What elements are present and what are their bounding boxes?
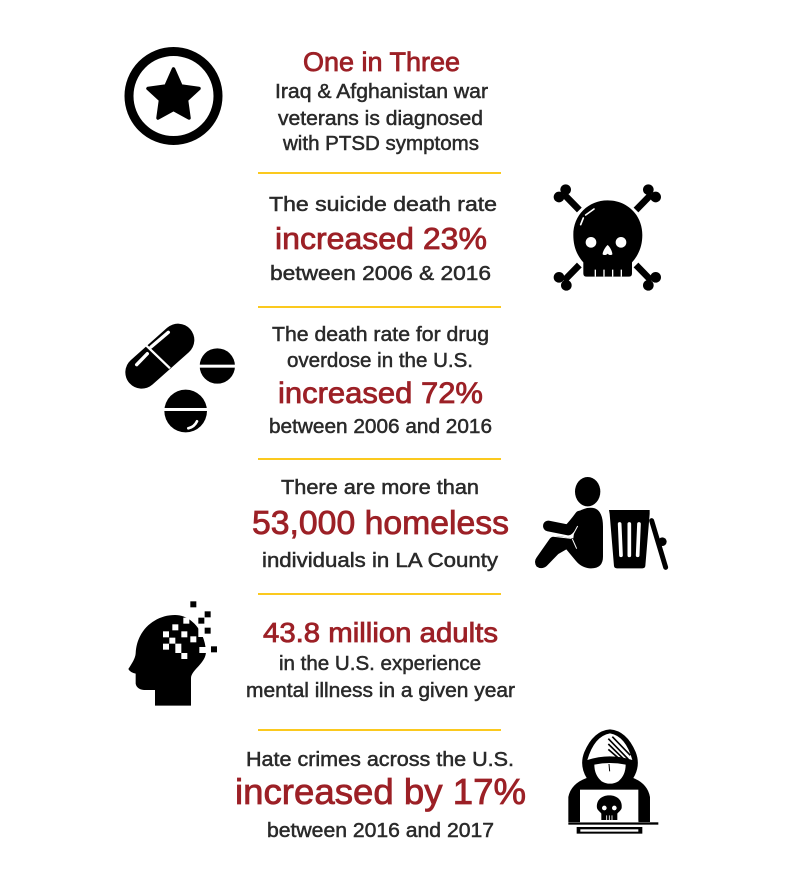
text: mental illness description: mental illness in a given year [246,680,515,702]
heading: increased 23%: increased 23% [275,221,487,256]
panel: mental illness statistic [128,601,515,706]
icon: hooded hacker at laptop [568,729,658,834]
text: PTSD description: Iraq & Afghanistan war [275,81,488,103]
text: PTSD description: with PTSD symptoms [282,133,479,155]
text: homeless intro: There are more than [281,477,479,499]
text: overdose intro [272,324,489,372]
panel: hate crimes statistic [235,729,658,842]
text: overdose period: between 2006 and 2016 [269,416,492,438]
panel: suicide statistic [269,184,661,291]
heading: increased 72%: increased 72% [278,377,483,410]
text: overdose intro: overdose in the U.S. [287,350,473,372]
panel: PTSD statistic [129,47,488,155]
icon: skull and crossbones [554,184,661,291]
heading: 53,000 homeless: 53,000 homeless [252,504,509,541]
text: hate crimes intro: Hate crimes across the U.S. [246,749,514,771]
text: suicide period: between 2006 & 2016 [270,263,491,285]
heading: One in Three: One in Three [303,47,460,77]
text: hate crimes period: between 2016 and 2017 [267,820,494,842]
panel: homelessness statistic [252,477,667,572]
text: suicide intro: The suicide death rate [269,194,497,216]
text: PTSD description [275,81,488,155]
icon: head with dissolving pixels [128,601,217,706]
icon: person sitting beside trash can [535,477,667,568]
text: mental illness description [246,653,515,702]
icon: star in circle [129,52,218,140]
text: mental illness description: in the U.S. experience [279,653,481,675]
text: PTSD description: veterans is diagnosed [278,108,483,130]
panel: drug overdose statistic [137,324,492,438]
text: LA County: individuals in LA County [262,550,498,572]
icon: pills [137,332,236,432]
heading: increased by 17%: increased by 17% [235,771,526,812]
text: overdose intro: The death rate for drug [272,324,489,346]
heading: 43.8 million adults: 43.8 million adults [263,617,498,648]
